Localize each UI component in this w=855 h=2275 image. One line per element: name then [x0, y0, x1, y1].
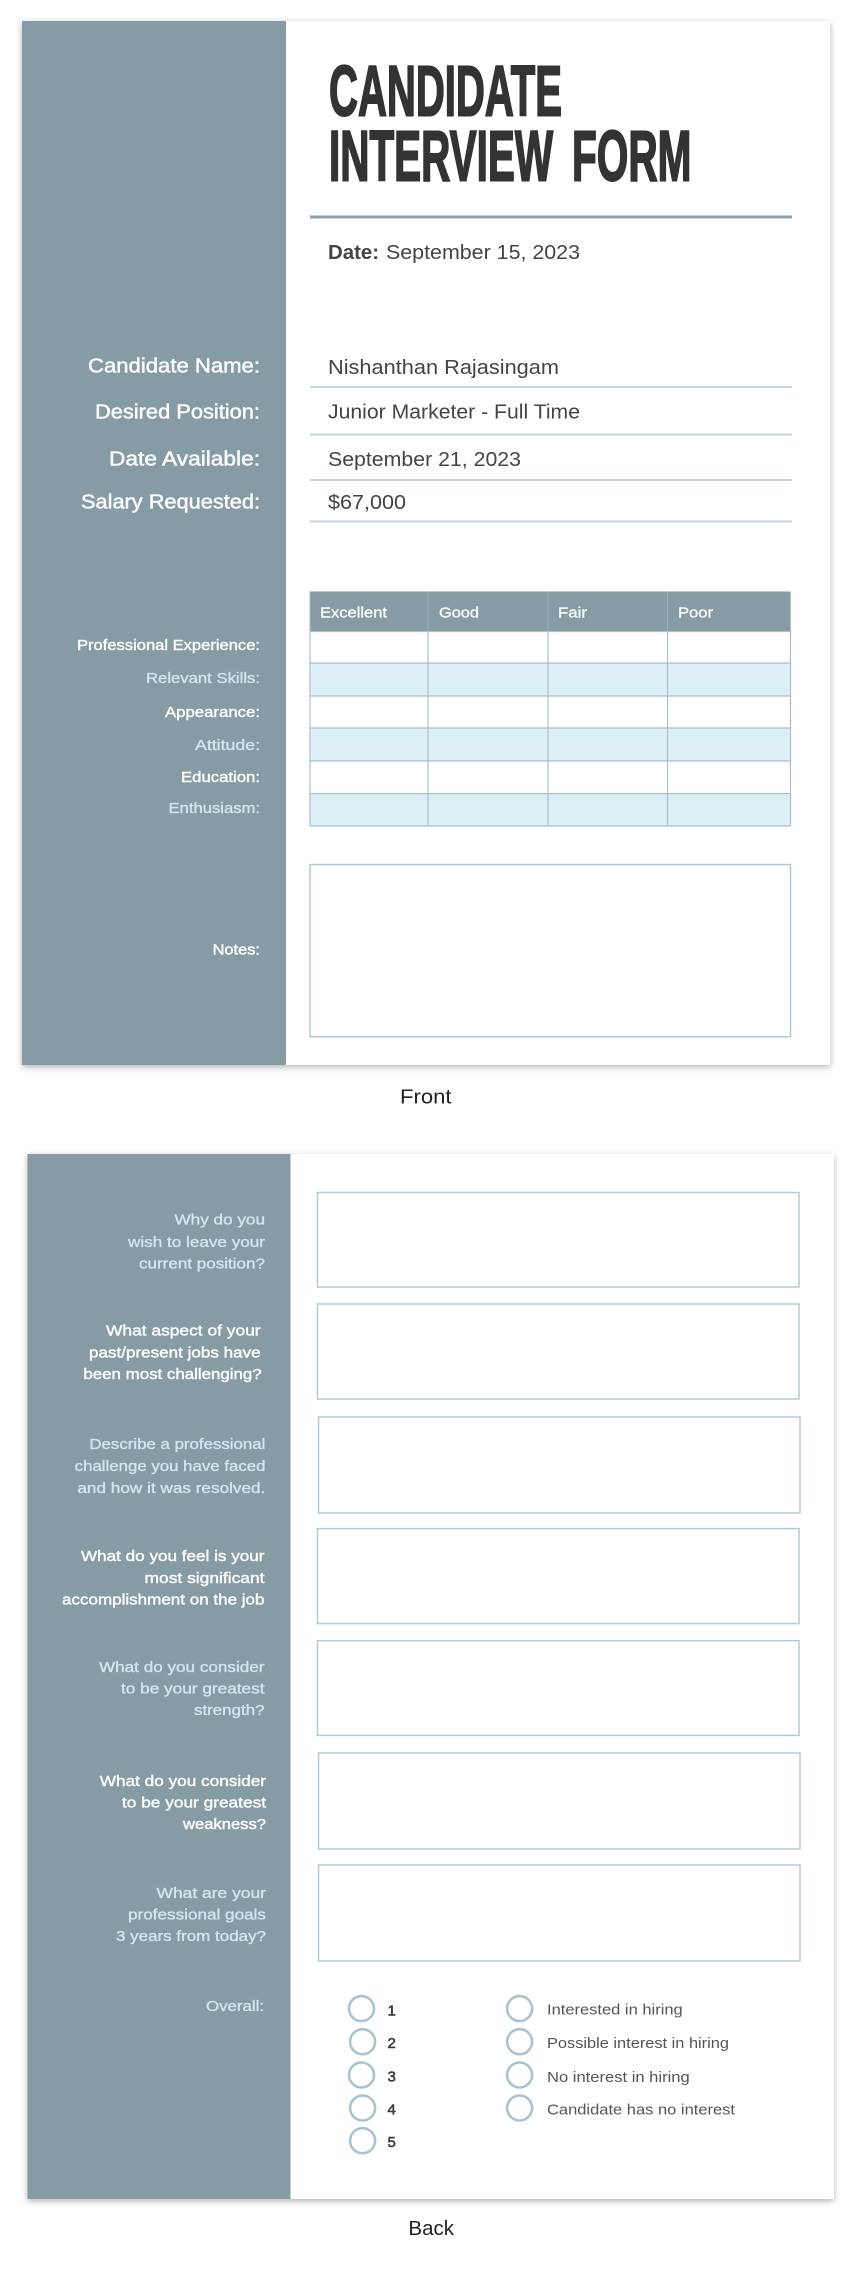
candidate detail values: September 21, 2023: [328, 448, 521, 471]
question 3: and how it was resolved.: [77, 1480, 265, 1497]
question 5: [99, 1659, 265, 1719]
candidate detail values: $67,000: [328, 491, 406, 514]
question 1: wish to leave your: [127, 1234, 265, 1251]
question 2: What aspect of your: [106, 1323, 261, 1340]
candidate detail values: Junior Marketer - Full Time: [328, 401, 580, 424]
score options 1 to 5: 1: [388, 2002, 396, 2020]
title: CANDIDATE: [329, 52, 562, 132]
answer box 4: [318, 1529, 799, 1624]
date line: September 15, 2023: [386, 241, 580, 264]
back sidebar: [28, 1154, 290, 2199]
score options 1 to 5: 2: [388, 2035, 396, 2052]
hiring interest options: No interest in hiring: [547, 2069, 690, 2086]
notes label: Notes:: [213, 942, 260, 959]
candidate detail labels: [81, 356, 260, 514]
candidate detail values: [328, 356, 580, 514]
date line: Date:: [328, 242, 379, 264]
question 7: professional goals: [128, 1906, 266, 1924]
question 4: most significant: [144, 1570, 265, 1587]
notes box: [310, 865, 790, 1037]
hiring interest options: Interested in hiring: [547, 2002, 683, 2019]
question 7: What are your: [156, 1885, 266, 1902]
score options 1 to 5: 4: [388, 2102, 396, 2118]
question 2: [83, 1323, 262, 1383]
answer box 1: [318, 1192, 799, 1287]
front sidebar: [22, 21, 286, 1065]
table header: Poor: [678, 604, 713, 622]
table header: Excellent: [320, 604, 388, 622]
title: [329, 52, 692, 196]
table header: Good: [439, 604, 479, 622]
score options 1 to 5: 3: [388, 2068, 396, 2086]
candidate detail labels: Date Available:: [109, 449, 260, 471]
caption: front: Front: [400, 1086, 452, 1109]
table row labels: Education:: [181, 769, 260, 786]
question 7: [116, 1885, 266, 1945]
question 1: Why do you: [174, 1212, 265, 1229]
question 5: to be your greatest: [121, 1681, 265, 1698]
question 6: [100, 1773, 267, 1833]
question 4: [62, 1548, 265, 1609]
answer box 7: [318, 1865, 800, 1961]
question 5: What do you consider: [99, 1659, 265, 1676]
hiring interest options: Possible interest in hiring: [547, 2035, 729, 2052]
question 2: been most challenging?: [83, 1366, 262, 1383]
table row labels: Professional Experience:: [77, 637, 260, 654]
hiring interest options: [507, 1996, 736, 2120]
question 6: to be your greatest: [122, 1794, 267, 1812]
candidate detail values: Nishanthan Rajasingam: [328, 356, 559, 379]
question 5: strength?: [194, 1702, 264, 1719]
question 1: current position?: [139, 1256, 265, 1272]
title: FORM: [572, 118, 692, 196]
question 2: past/present jobs have: [89, 1344, 261, 1362]
question 1: [127, 1212, 265, 1272]
score options 1 to 5: 5: [388, 2134, 396, 2151]
table row labels: Enthusiasm:: [168, 800, 260, 817]
table header: Fair: [558, 604, 587, 622]
candidate detail labels: Desired Position:: [95, 402, 260, 424]
answer box 3: [318, 1417, 800, 1513]
candidate detail labels: Candidate Name:: [88, 356, 260, 378]
title: INTERVIEW: [329, 118, 553, 196]
question 3: [75, 1436, 266, 1497]
table row labels: Attitude:: [195, 737, 260, 754]
answer box 5: [318, 1641, 799, 1735]
table header: [310, 592, 790, 631]
question 6: What do you consider: [100, 1773, 266, 1790]
table row labels: [77, 637, 260, 817]
answer box 2: [318, 1304, 799, 1399]
question 7: 3 years from today?: [116, 1928, 266, 1945]
question 4: What do you feel is your: [81, 1548, 264, 1565]
answer box 6: [318, 1753, 800, 1849]
panel: back page: [28, 1154, 834, 2199]
question 4: accomplishment on the job: [62, 1592, 264, 1609]
rating table: [310, 592, 790, 826]
hiring interest options: Candidate has no interest: [547, 2102, 736, 2118]
caption: back: Back: [408, 2217, 455, 2240]
overall label: Overall:: [206, 1998, 264, 2015]
back page sheet: [28, 1154, 834, 2199]
panel: front page: [22, 21, 830, 1065]
question 3: challenge you have faced: [75, 1458, 266, 1475]
question 6: weakness?: [182, 1816, 266, 1833]
table row labels: Appearance:: [165, 704, 260, 721]
table row labels: Relevant Skills:: [146, 670, 260, 687]
front page sheet: [22, 21, 830, 1065]
score options 1 to 5: [349, 1996, 396, 2153]
question 3: Describe a professional: [89, 1436, 265, 1453]
candidate detail labels: Salary Requested:: [81, 492, 260, 514]
